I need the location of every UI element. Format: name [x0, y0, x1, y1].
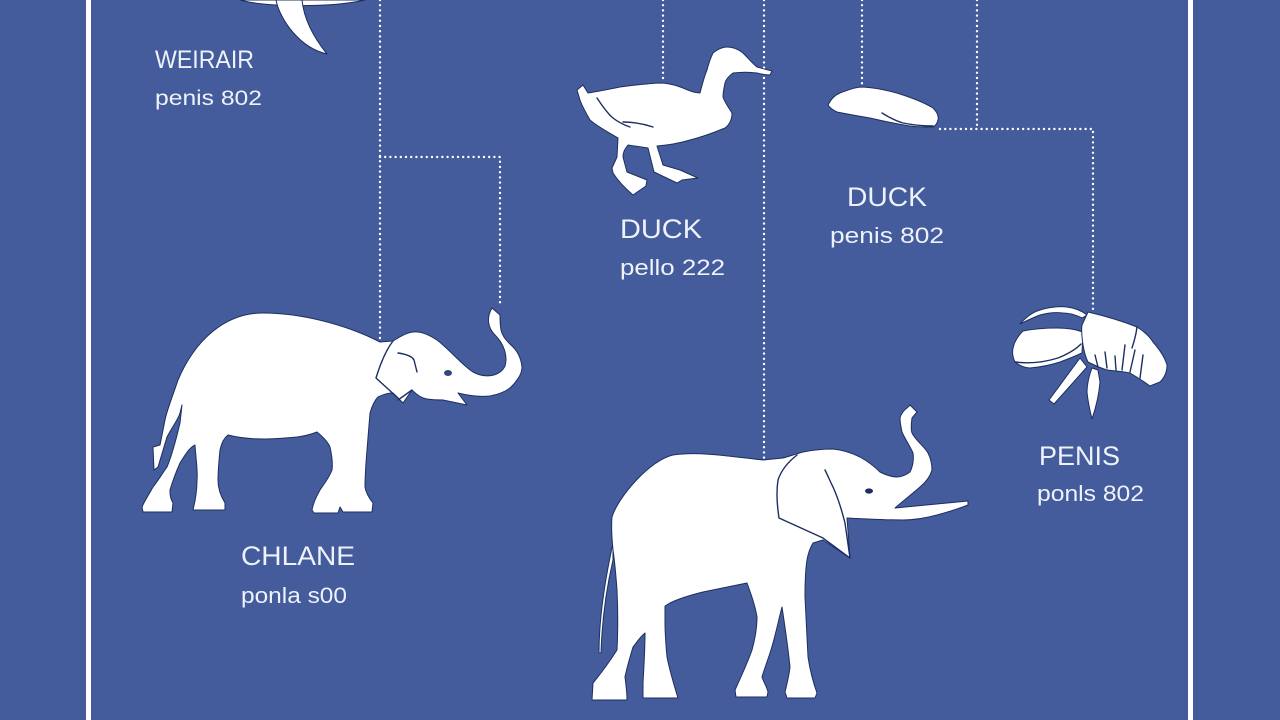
label: whale [155, 46, 262, 110]
label: whale: WEIRAIR [155, 46, 254, 74]
label: mussel [830, 182, 944, 248]
label: duck [620, 214, 725, 280]
label: whale: penis 802 [155, 87, 262, 110]
label: left elephant: ponla s00 [241, 583, 347, 608]
icon: mussel [828, 87, 938, 127]
icon: whale tail at top [240, 0, 365, 54]
icon: large elephant [592, 405, 968, 700]
label: duck: DUCK [620, 214, 702, 244]
label: left elephant: CHLANE [241, 541, 355, 571]
label: shrimp creature: PENIS [1039, 441, 1120, 471]
label: mussel: penis 802 [830, 223, 944, 248]
label: shrimp creature [1037, 441, 1144, 506]
icon: duck [577, 47, 772, 195]
icon: shrimp creature [1013, 307, 1167, 419]
label: left elephant [241, 541, 355, 608]
connectors: dotted tree lines [380, 0, 1093, 458]
label: shrimp creature: ponls 802 [1037, 481, 1144, 506]
label: mussel: DUCK [847, 182, 927, 212]
label: duck: pello 222 [620, 255, 725, 280]
icon: left elephant [142, 308, 522, 513]
